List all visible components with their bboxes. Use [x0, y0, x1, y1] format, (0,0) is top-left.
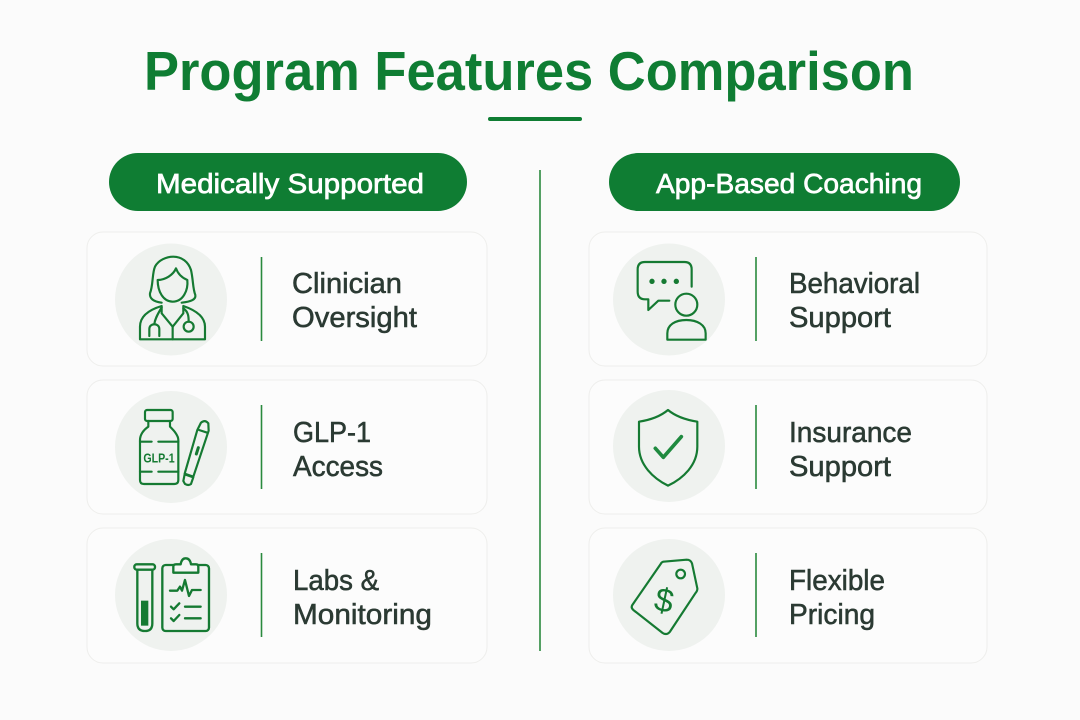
- label: glp-1 access: GLP-1: [293, 417, 371, 449]
- label: insurance support: [789, 417, 912, 483]
- heading pill: medically supported: Medically Supported: [156, 168, 424, 199]
- label: flexible pricing: Pricing: [789, 599, 875, 631]
- card: clinician oversight: [87, 232, 487, 366]
- heading pill: app-based coaching: App-Based Coaching: [656, 168, 922, 199]
- label: glp-1 access: Access: [293, 451, 383, 483]
- icon: chat bubble and person: [638, 262, 706, 340]
- card: flexible pricing: [589, 528, 987, 663]
- label: clinician oversight: Oversight: [292, 302, 417, 334]
- card: insurance support: [589, 380, 987, 514]
- card: behavioral support: [589, 232, 987, 366]
- card: glp-1 access: [87, 380, 487, 514]
- label: flexible pricing: Flexible: [789, 565, 885, 597]
- label: clinician oversight: Clinician: [292, 268, 402, 300]
- icon: price tag: $: [651, 581, 677, 621]
- label: insurance support: Support: [789, 451, 891, 483]
- title: Program Features Comparison: [144, 40, 914, 102]
- label: labs and monitoring: Monitoring: [293, 599, 432, 631]
- center divider: [539, 170, 541, 651]
- label: insurance support: Insurance: [789, 417, 912, 449]
- icon: test tube and clipboard: [134, 558, 209, 631]
- panel: app-based coaching: [589, 153, 987, 663]
- heading pill: medically supported: [109, 153, 467, 211]
- icon: glp-1 bottle and pen: [140, 410, 209, 485]
- label: flexible pricing: [789, 565, 885, 631]
- label: behavioral support: Behavioral: [789, 268, 920, 300]
- panel: medically supported: [87, 153, 487, 663]
- card: labs and monitoring: [87, 528, 487, 663]
- label: labs and monitoring: [293, 565, 432, 631]
- heading pill: app-based coaching: [609, 153, 960, 211]
- icon: clinician: [140, 257, 205, 339]
- label: behavioral support: Support: [789, 302, 891, 334]
- icon: price tag: [632, 560, 697, 634]
- label: labs and monitoring: Labs &: [293, 565, 379, 597]
- icon: shield with check: [639, 410, 697, 486]
- label: behavioral support: [789, 268, 920, 334]
- label: clinician oversight: [292, 268, 417, 334]
- icon: glp-1 bottle and pen: GLP-1: [143, 451, 175, 465]
- label: glp-1 access: [293, 417, 383, 483]
- title underline: [488, 117, 582, 121]
